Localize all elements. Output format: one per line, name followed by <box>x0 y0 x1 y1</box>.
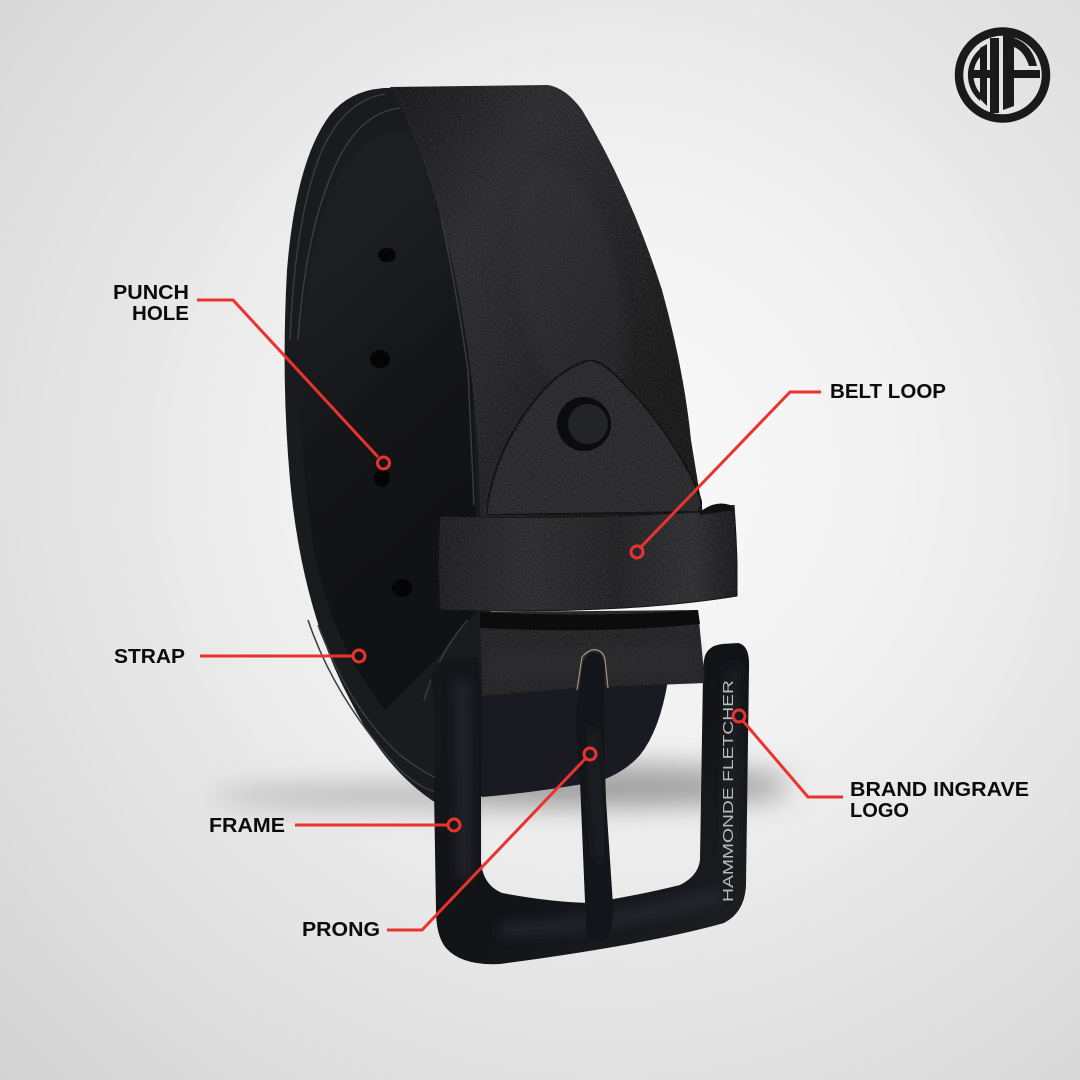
callout: strap <box>114 646 365 668</box>
keeper tip <box>487 360 702 515</box>
callout: brand ingrave logo: LOGO <box>850 800 909 822</box>
belt loop <box>438 505 737 611</box>
brand logo <box>959 32 1046 118</box>
strap: outer coil and inner side <box>285 86 550 803</box>
stitched strap over frame bar <box>480 610 705 696</box>
strap: front face <box>390 85 704 520</box>
callout: punch hole <box>113 248 412 597</box>
callout: brand ingrave logo: BRAND INGRAVE <box>850 779 1029 801</box>
callout: frame <box>209 815 460 837</box>
rivet <box>557 397 611 451</box>
callout: brand ingrave logo <box>733 710 1029 822</box>
strap: inner face <box>300 132 478 710</box>
buckle frame <box>431 643 749 964</box>
engraved brand text: HAMMONDE FLETCHER <box>720 680 737 902</box>
callout: strap: STRAP <box>114 646 185 668</box>
prong <box>576 652 613 942</box>
callout: belt loop <box>631 381 946 558</box>
floor shadow <box>210 762 790 810</box>
callout: belt loop: BELT LOOP <box>830 381 946 403</box>
callout: frame: FRAME <box>209 815 285 837</box>
callout: punch hole: PUNCH <box>113 282 189 304</box>
strap: front highlight <box>494 152 646 428</box>
callout: prong <box>302 748 596 941</box>
belt illustration <box>285 85 749 964</box>
strap: coil edge lines <box>290 94 474 792</box>
strap: lower band behind buckle <box>482 680 668 797</box>
buckle highlights <box>462 665 733 930</box>
callout: prong: PRONG <box>302 919 380 941</box>
callout: punch hole: HOLE <box>132 303 189 325</box>
